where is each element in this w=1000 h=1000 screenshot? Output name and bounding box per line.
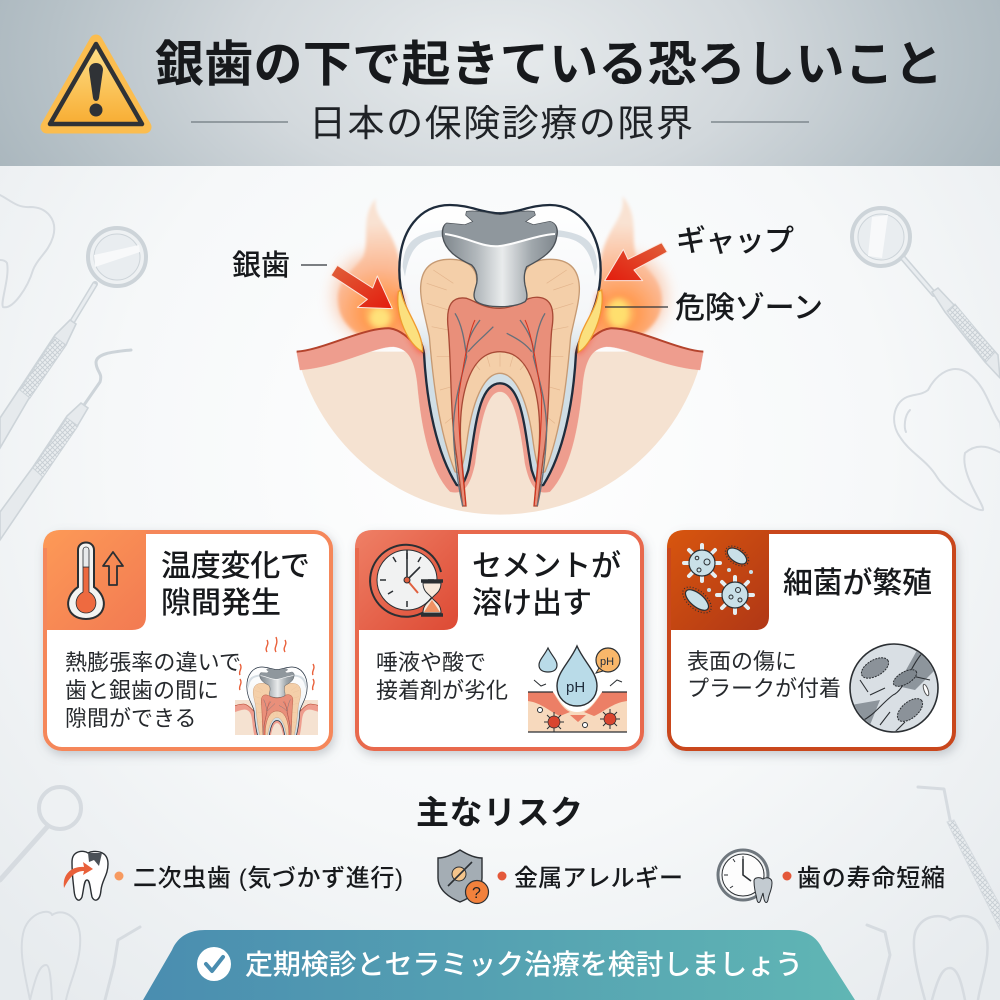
dentin tubule lines	[427, 270, 573, 423]
enamel and root outline	[399, 205, 601, 485]
danger zone left	[398, 290, 423, 352]
arrow left	[331, 265, 392, 309]
body text	[376, 650, 508, 703]
icon: check mark	[197, 947, 231, 981]
label: 銀歯: 銀歯	[232, 249, 290, 282]
icon: microscope view of plaque	[850, 644, 940, 732]
risk item: shorter tooth life: 歯の寿命短縮	[797, 865, 945, 892]
mini tooth illustration	[235, 636, 318, 735]
nerves	[453, 313, 547, 506]
subtitle: 日本の保険診療の限界	[309, 103, 693, 144]
heading: 温度変化で	[161, 550, 310, 583]
banner text: 定期検診とセラミック治療を検討しましょう	[245, 949, 803, 980]
body text: 隙間ができる	[65, 706, 197, 731]
heading: 細菌が繁殖	[783, 567, 932, 600]
icon: pH acid drop: pH	[600, 656, 614, 668]
icon: clock with tooth	[718, 850, 772, 903]
flames	[333, 196, 667, 343]
panel: cement dissolves: 溶け出す	[472, 587, 592, 620]
body text: 歯と銀歯の間に	[65, 678, 219, 703]
silver filling	[442, 211, 557, 307]
risk item: metal allergy: 金属アレルギー	[514, 865, 683, 892]
body text	[687, 649, 841, 701]
dentin	[421, 259, 579, 473]
jaw base	[297, 352, 703, 515]
icon: warning triangle	[47, 41, 145, 127]
body text: 表面の傷に	[687, 649, 797, 674]
icon: viruses and bacteria	[678, 542, 753, 618]
inflamed glow	[400, 293, 600, 353]
body text	[65, 650, 241, 731]
icon: clock and hourglass	[370, 545, 443, 617]
icon: shield with question mark: ?	[472, 885, 481, 902]
header band	[0, 0, 1000, 166]
risk item: metal allergy	[438, 850, 683, 904]
icon: thermometer	[68, 542, 123, 619]
body text: 接着剤が劣化	[376, 678, 508, 703]
title: 銀歯の下で起きている恐ろしいこと	[155, 38, 943, 92]
risk item: secondary caries	[64, 851, 403, 900]
body text: 唾液や酸で	[376, 650, 486, 675]
call-to-action banner	[143, 930, 855, 1000]
panel: temperature change	[43, 530, 338, 757]
tooth cross-section illustration	[297, 196, 703, 515]
icon: pH acid drop	[528, 646, 627, 732]
icon: shield with question mark	[438, 850, 488, 904]
icon: tooth with cavity and arrow	[64, 851, 108, 900]
label: 銀歯	[232, 249, 327, 282]
risk item: shorter tooth life	[718, 850, 945, 903]
heading: セメントが	[472, 550, 621, 583]
section heading: main risks: 主なリスク	[416, 794, 583, 831]
label: ギャップ: ギャップ	[676, 225, 794, 258]
panel: bacteria multiply	[667, 530, 954, 749]
risk item: secondary caries: 二次虫歯 (気づかず進行)	[133, 865, 403, 892]
gum	[297, 328, 703, 492]
icon: pH acid drop: pH	[566, 679, 585, 696]
pulp chamber	[448, 297, 553, 506]
panel: cement dissolves	[355, 530, 642, 749]
panel: temperature change: 隙間発生	[161, 587, 281, 620]
body text: プラークが付着	[687, 676, 841, 701]
body text: 熱膨張率の違いで	[65, 650, 241, 675]
label: 危険ゾーン: 危険ゾーン	[675, 292, 823, 325]
arrow right	[605, 243, 667, 281]
danger zone right	[578, 290, 602, 352]
